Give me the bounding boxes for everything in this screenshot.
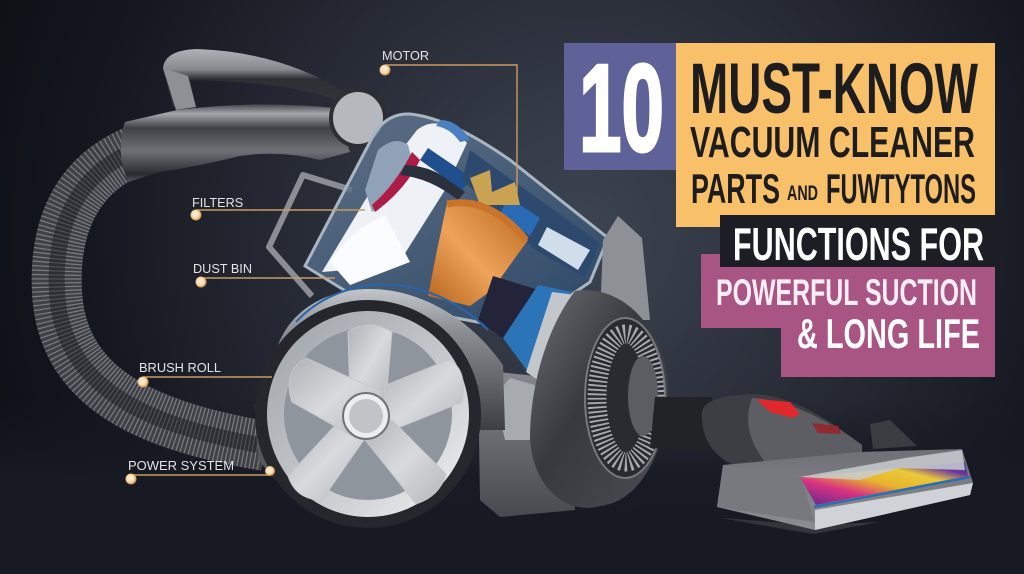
floor nozzle neck	[702, 394, 862, 470]
label: brush roll: BRUSH ROLL	[139, 361, 221, 375]
transparent dust bin	[305, 114, 608, 330]
lower body block	[478, 370, 575, 517]
silver fin	[526, 292, 584, 392]
label: filters: FILTERS	[192, 196, 243, 210]
orange motor housing	[428, 201, 528, 306]
vacuum cleaner illustration	[57, 49, 973, 534]
label: dust bin: DUST BIN	[193, 262, 252, 276]
label: filters	[190, 196, 365, 220]
panel: orange heading: PARTS	[691, 165, 780, 212]
panel: pink subheading	[701, 254, 995, 377]
filter cylinder	[322, 120, 472, 285]
wheel	[255, 300, 481, 528]
rear wheel cap	[255, 385, 285, 490]
hose	[57, 145, 265, 446]
label: power system: POWER SYSTEM	[128, 459, 234, 473]
wheel hub	[343, 393, 389, 439]
dark motor cylinder	[478, 276, 545, 340]
title block	[564, 40, 995, 377]
label: dust bin	[193, 262, 335, 288]
bin frame handle	[269, 175, 352, 296]
handle tube	[121, 104, 350, 182]
right housing	[530, 290, 668, 508]
side post	[600, 216, 650, 320]
label: brush roll	[138, 361, 272, 388]
carrying handle	[163, 49, 362, 116]
panel: orange heading: AND	[787, 182, 818, 205]
nozzle connector tube	[650, 397, 712, 452]
label: motor	[380, 49, 517, 195]
panel: number 10	[564, 40, 677, 178]
label: power system	[126, 459, 275, 484]
swivel disc	[331, 90, 385, 146]
floor nozzle switch	[870, 420, 917, 449]
blue internals	[462, 150, 600, 278]
label: motor: MOTOR	[382, 49, 429, 63]
panel: number 10: 10	[579, 40, 664, 178]
panel: orange heading	[676, 43, 995, 227]
vent fan	[585, 318, 665, 478]
wheel spokes	[288, 325, 463, 504]
floor nozzle head	[717, 449, 973, 534]
wheel arch	[265, 289, 505, 430]
